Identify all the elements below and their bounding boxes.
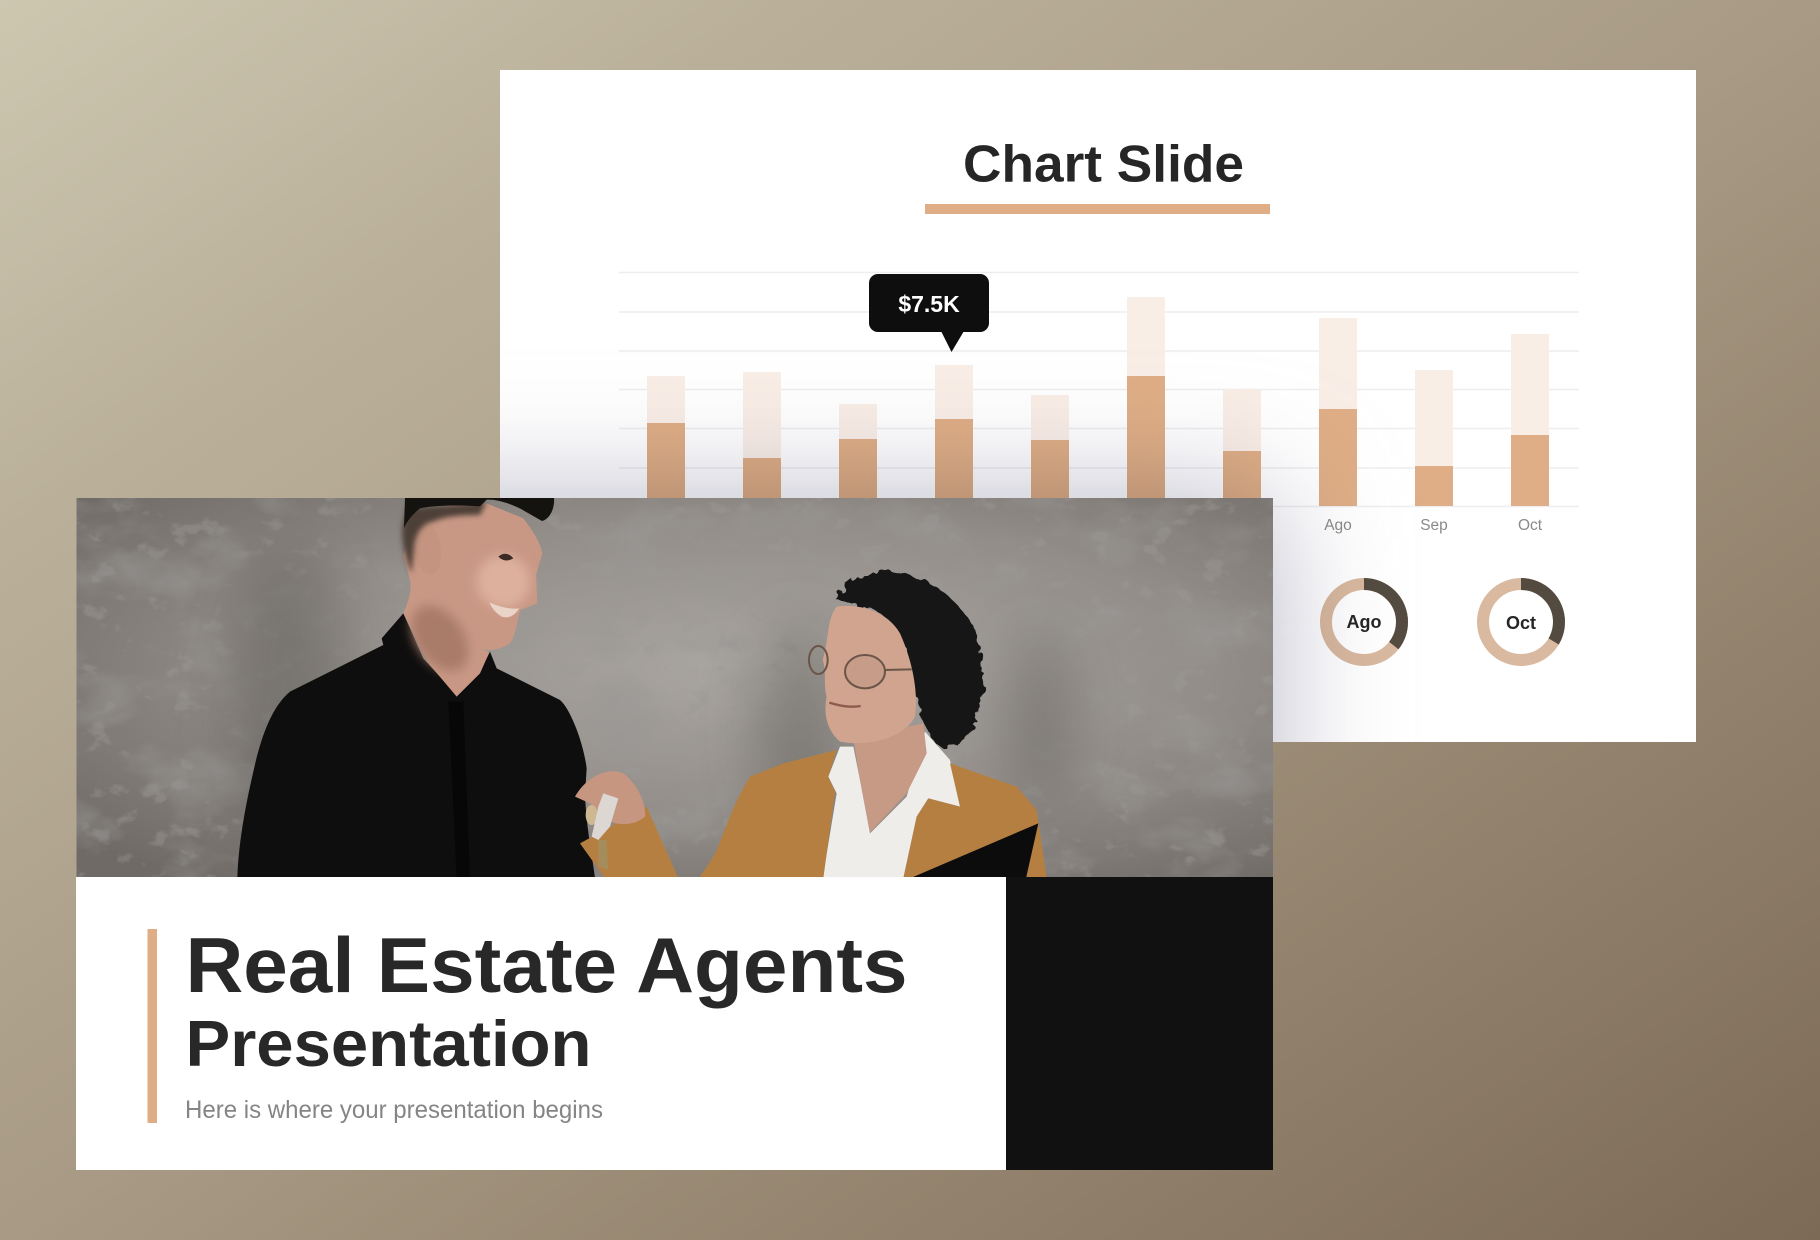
donut: Ago: Ago <box>1346 612 1382 632</box>
month labels: Sep <box>1420 517 1448 534</box>
dark bars <box>647 376 1549 506</box>
woman: face <box>823 606 916 743</box>
man: shirt <box>237 613 595 878</box>
accent bar <box>148 929 157 1123</box>
man: cheek light <box>477 555 530 608</box>
panel: chart slide <box>500 70 1696 742</box>
tooltip <box>869 274 989 352</box>
main title: Real Estate Agents <box>186 921 908 1009</box>
woman: jacket <box>698 750 837 878</box>
black block <box>1006 877 1273 1170</box>
chart slide title: Chart Slide <box>963 136 1244 194</box>
month labels: Oct <box>1518 517 1543 534</box>
month labels <box>1324 517 1543 534</box>
woman: hand <box>575 771 645 824</box>
photo: agents handing over keys <box>76 497 1273 878</box>
light bars <box>647 297 1549 467</box>
white title card <box>76 877 1006 1170</box>
tooltip: $7.5K <box>898 291 960 317</box>
figure: man <box>237 497 595 878</box>
subtitle heading: Presentation <box>186 1007 592 1080</box>
donut: Oct: Oct <box>1506 613 1536 633</box>
donut: Oct <box>1483 584 1559 660</box>
man: ear <box>410 520 444 577</box>
woman: neck <box>853 723 927 833</box>
slide shadow on chart panel <box>500 426 1344 742</box>
bar chart <box>619 272 1579 534</box>
keys <box>586 793 618 870</box>
woman: glasses <box>809 646 912 688</box>
panel: title slide <box>76 497 1273 1170</box>
figure: woman <box>575 571 1047 878</box>
woman: sleeve <box>580 807 678 878</box>
man: eye and smile <box>498 554 513 560</box>
woman: mouth <box>829 703 861 707</box>
woman: hair <box>837 571 982 748</box>
man: face and neck <box>403 503 542 697</box>
donut: Ago <box>1326 584 1402 660</box>
man: neck shade <box>404 602 472 676</box>
man: hair fade <box>402 502 487 573</box>
month labels: Ago <box>1324 517 1352 534</box>
wall shadows <box>230 550 1070 850</box>
man: hair <box>404 497 554 528</box>
tagline: Here is where your presentation begins <box>185 1096 603 1124</box>
woman: blouse <box>823 732 960 878</box>
woman: clipboard <box>910 823 1038 878</box>
title underline <box>925 204 1270 214</box>
